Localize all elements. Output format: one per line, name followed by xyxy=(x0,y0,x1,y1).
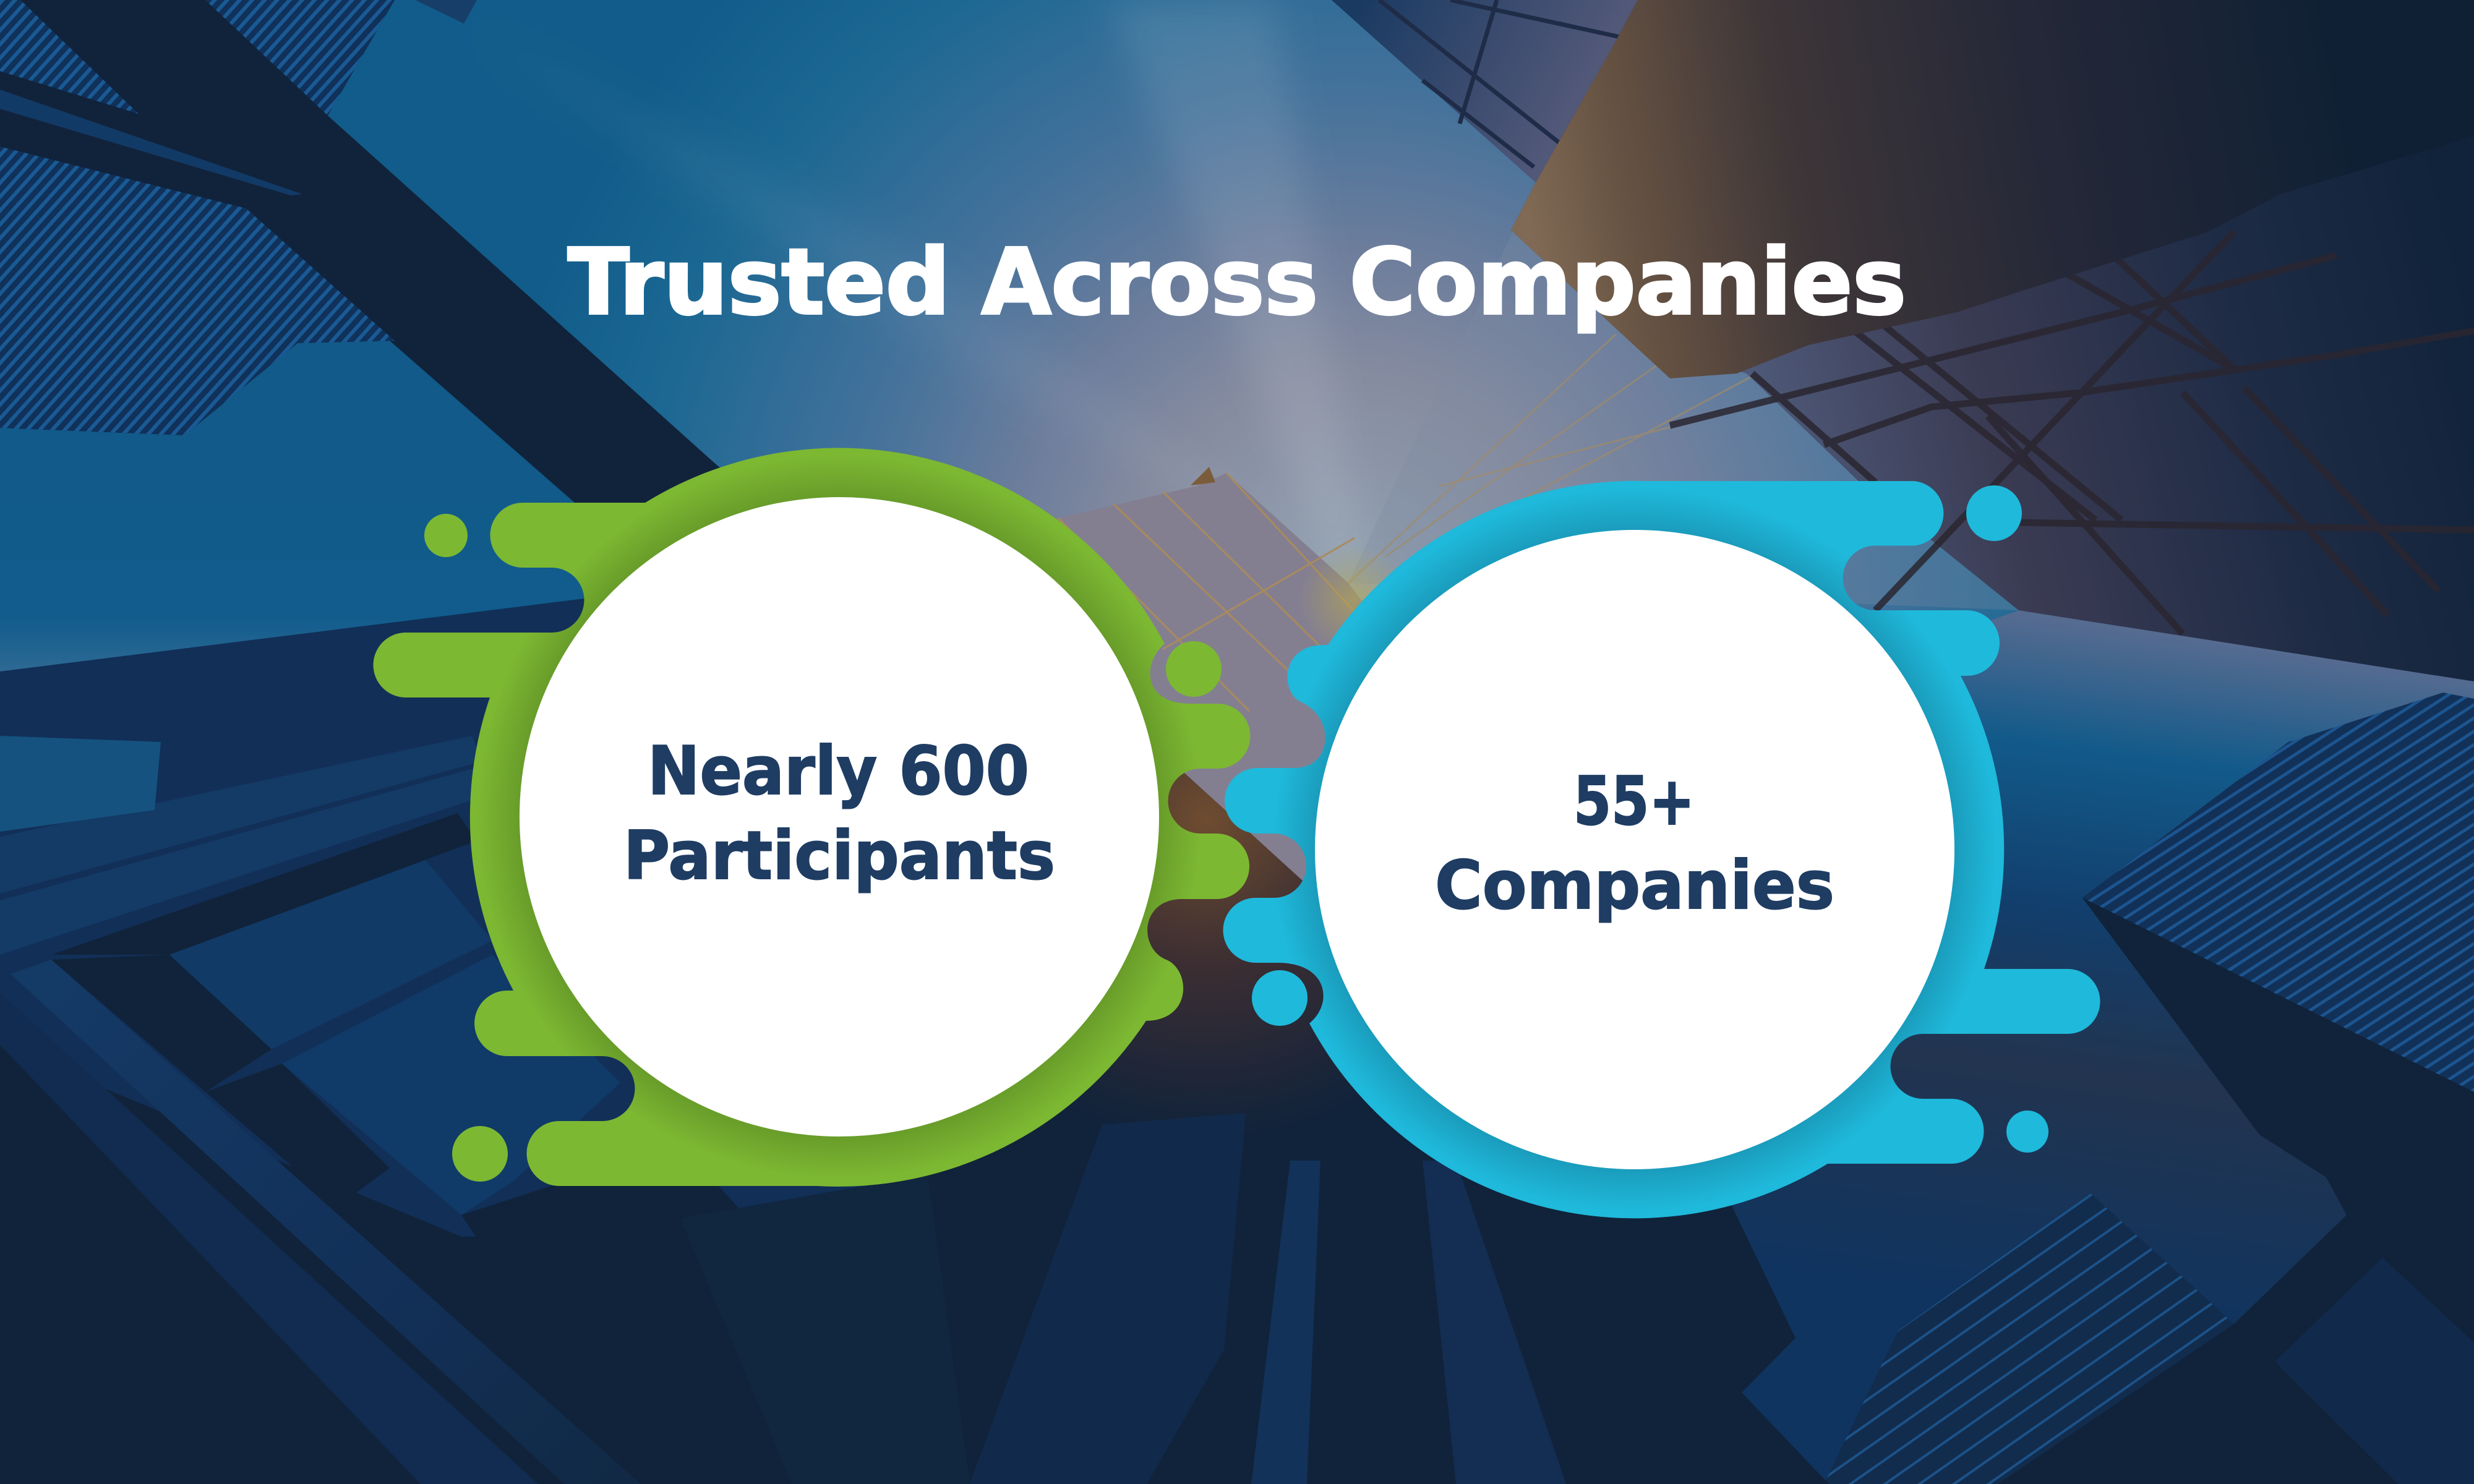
stat text: nearly 600 participants: Participants xyxy=(623,817,1055,895)
green splash ring xyxy=(346,433,1274,1200)
stat text: nearly 600 participants: Nearly 600 xyxy=(648,733,1029,810)
stat text: 55+ companies: 55+ xyxy=(1573,763,1695,840)
green dot right xyxy=(1166,641,1222,697)
stat text: nearly 600 participants xyxy=(623,733,1055,895)
green dot bottom left xyxy=(452,1126,508,1182)
blue dot top right xyxy=(1966,485,2022,541)
green dot top left xyxy=(424,514,468,557)
white circle xyxy=(1315,530,1954,1169)
blue splash ring xyxy=(1212,470,2109,1230)
panel: participants blob xyxy=(346,433,1274,1200)
panel: companies blob xyxy=(1212,470,2109,1230)
white circle xyxy=(520,497,1159,1136)
blue dot left xyxy=(1252,970,1308,1026)
title: Trusted Across Companies xyxy=(568,229,1906,335)
stat text: 55+ companies: Companies xyxy=(1435,847,1834,924)
stat text: 55+ companies xyxy=(1435,763,1834,924)
blue dot bottom right xyxy=(2006,1111,2048,1153)
